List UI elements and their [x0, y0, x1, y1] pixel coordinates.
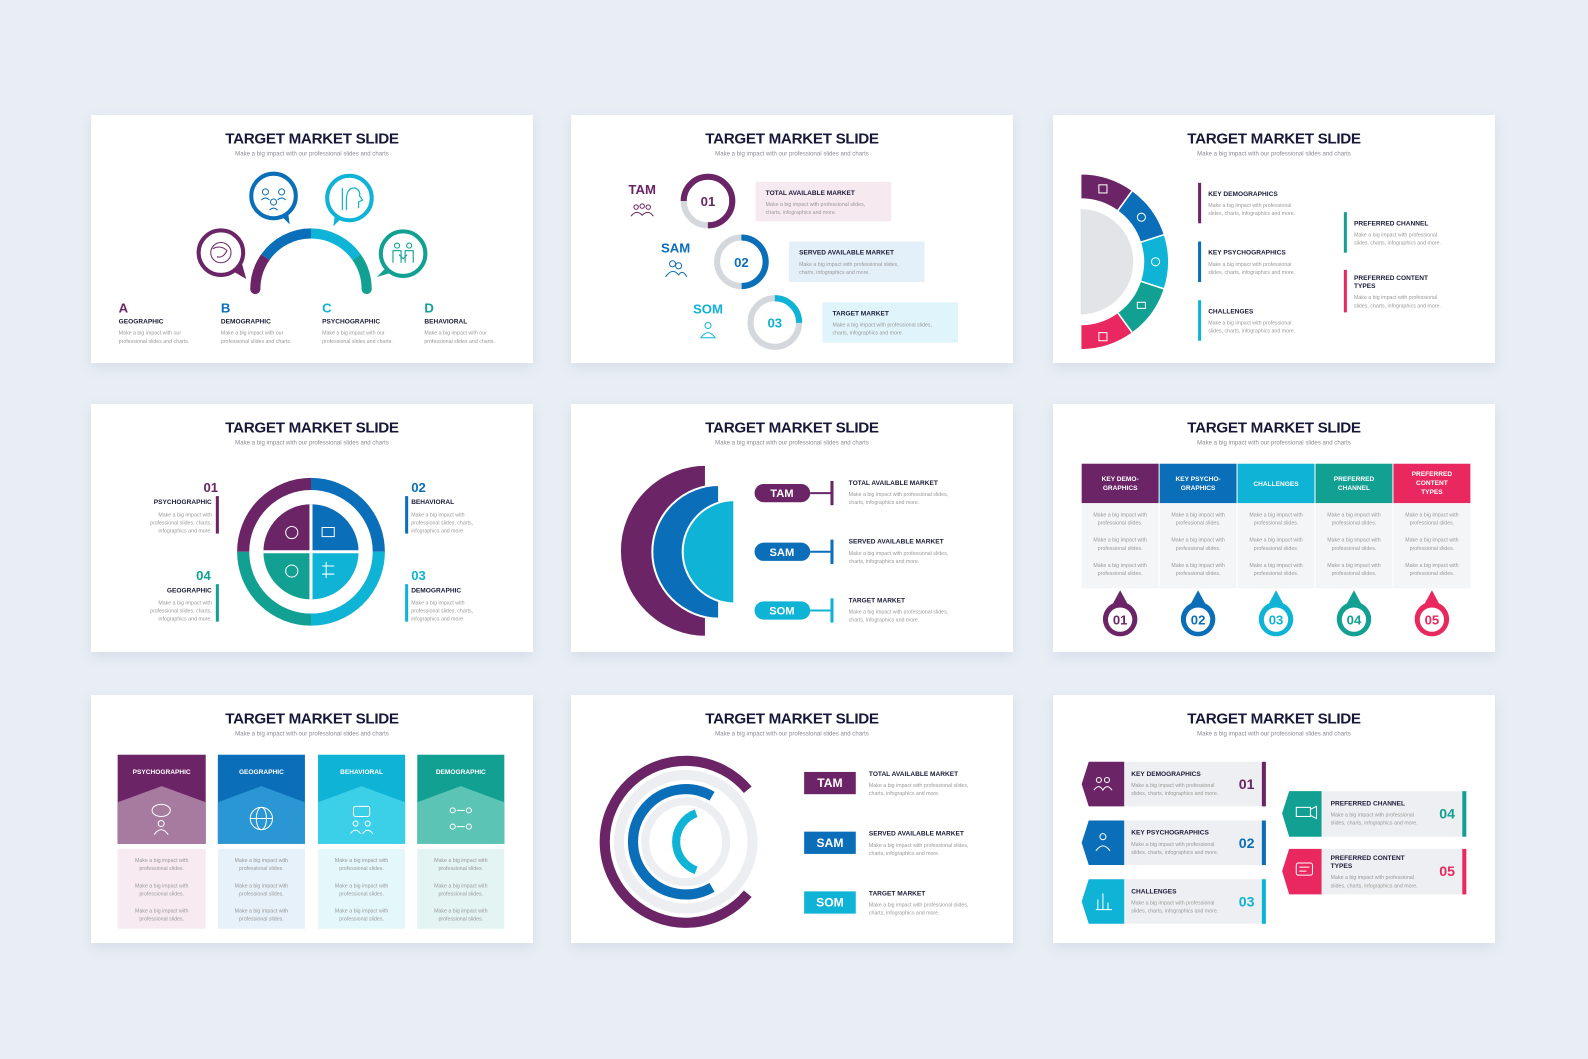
column 03: Make a big impact with — [1249, 538, 1303, 544]
SOM row: charts, infographics and more. — [869, 911, 940, 917]
segment A: GEOGRAPHIC — [119, 319, 164, 326]
SAM row — [755, 539, 948, 565]
card demographic: professional slides. — [438, 917, 483, 923]
title: TARGET MARKET SLIDE — [1187, 710, 1361, 727]
slide 1: arc with bubbles — [91, 115, 533, 363]
title — [1187, 130, 1361, 157]
title: TARGET MARKET SLIDE — [705, 419, 879, 436]
item: preferred content types: PREFERRED CONTENT — [1354, 275, 1428, 282]
TAM row — [804, 771, 968, 797]
label 02 behavioral: infographics and more. — [411, 529, 465, 535]
segment C: C — [322, 300, 332, 315]
column 04: PREFERRED — [1334, 476, 1374, 483]
SAM row: Make a big impact with professional slides, — [799, 262, 899, 268]
card psychographic: professional slides. — [139, 917, 184, 923]
item: challenges: CHALLENGES — [1208, 308, 1254, 315]
column 03: CHALLENGES — [1253, 481, 1299, 488]
TAM row: TOTAL AVAILABLE MARKET — [849, 480, 938, 487]
item 02 — [1082, 821, 1266, 865]
column 01: professional slides. — [1098, 520, 1142, 526]
column 05: Make a big impact with — [1405, 563, 1459, 569]
segment A — [119, 300, 189, 345]
segment C: Make a big impact with our — [322, 331, 385, 337]
TAM row: Make a big impact with professional slides, — [849, 492, 948, 498]
column 05: professional slides. — [1410, 571, 1454, 577]
SOM row: SOM — [693, 301, 723, 316]
column 02: Make a big impact with — [1171, 563, 1225, 569]
column 04: Make a big impact with — [1327, 538, 1381, 544]
column 03: 03 — [1269, 613, 1283, 628]
item 04 — [1282, 791, 1466, 837]
column 05 — [1393, 464, 1470, 636]
SOM row: charts, infographics and more. — [832, 331, 903, 337]
SOM row — [693, 298, 958, 347]
title — [705, 419, 879, 446]
item 01: KEY DEMOGRAPHICS — [1131, 771, 1201, 778]
SOM row: TARGET MARKET — [869, 890, 925, 897]
item 05: 05 — [1439, 864, 1455, 880]
column 02: Make a big impact with — [1171, 512, 1225, 518]
label 02 behavioral: 02 — [411, 480, 426, 495]
SAM row: SERVED AVAILABLE MARKET — [869, 831, 964, 838]
column 01: professional slides. — [1098, 546, 1142, 552]
TAM row: TOTAL AVAILABLE MARKET — [766, 190, 855, 197]
label 03 demographic: DEMOGRAPHIC — [411, 587, 461, 594]
nested half discs — [620, 465, 734, 637]
segment D: professional slides and charts. — [424, 339, 495, 345]
column 01: Make a big impact with — [1093, 538, 1147, 544]
bubble: geographic — [199, 230, 246, 279]
card behavioral: Make a big impact with — [335, 909, 388, 915]
item: preferred channel: slides, charts, infographics and more. — [1354, 241, 1441, 247]
item 05: Make a big impact with professional — [1331, 875, 1414, 881]
column 04: Make a big impact with — [1327, 512, 1381, 518]
item: challenges — [1198, 300, 1295, 341]
title: TARGET MARKET SLIDE — [225, 710, 399, 727]
TAM row: TAM — [817, 776, 843, 790]
title: Make a big impact with our professional slides and charts — [715, 731, 869, 737]
label 04 geographic: infographics and more. — [158, 617, 212, 623]
card demographic: Make a big impact with — [434, 883, 488, 889]
segment B: professional slides and charts. — [221, 339, 292, 345]
column 03: professional slides. — [1254, 546, 1298, 552]
SAM row: charts, infographics and more. — [799, 270, 870, 276]
title — [1187, 710, 1361, 737]
label 02 behavioral: BEHAVIORAL — [411, 499, 454, 506]
card behavioral: Make a big impact with — [335, 858, 388, 864]
title — [705, 710, 879, 737]
segment A: professional slides and charts. — [119, 339, 189, 345]
item 02: slides, charts, infographics and more. — [1131, 850, 1218, 856]
TAM row: charts, infographics and more. — [869, 791, 940, 797]
card behavioral: BEHAVIORAL — [340, 769, 383, 776]
column 05: Make a big impact with — [1405, 538, 1459, 544]
item 04: slides, charts, infographics and more. — [1331, 821, 1418, 827]
title: Make a big impact with our professional slides and charts — [1197, 440, 1351, 446]
column 01: professional slides. — [1098, 571, 1142, 577]
card psychographic: professional slides. — [139, 891, 184, 897]
item 05: PREFERRED CONTENT — [1331, 855, 1405, 862]
item: key psychographics — [1198, 242, 1295, 282]
bubble: behavioral — [377, 231, 425, 277]
item: challenges: slides, charts, infographics and more. — [1208, 329, 1295, 335]
title: Make a big impact with our professional slides and charts — [235, 440, 389, 446]
column 04 — [1316, 464, 1392, 636]
column 04: professional slides. — [1332, 571, 1376, 577]
card psychographic: Make a big impact with — [135, 909, 188, 915]
column 02: 02 — [1191, 613, 1205, 628]
segment A: Make a big impact with our — [119, 331, 181, 337]
title: Make a big impact with our professional slides and charts — [235, 151, 389, 157]
half donut chart — [1081, 174, 1169, 350]
card demographic: Make a big impact with — [434, 858, 488, 864]
card psychographic: Make a big impact with — [135, 883, 188, 889]
card behavioral: professional slides. — [339, 866, 384, 872]
slide 7: four column cards — [91, 695, 533, 943]
SOM row: TARGET MARKET — [832, 310, 889, 317]
item: challenges: Make a big impact with professional — [1208, 321, 1291, 327]
column 04: CHANNEL — [1338, 485, 1370, 492]
SAM row — [661, 237, 925, 286]
title — [225, 419, 399, 446]
title: TARGET MARKET SLIDE — [1187, 419, 1361, 436]
column 03: professional slides. — [1254, 571, 1298, 577]
SAM row: SAM — [661, 241, 690, 256]
title — [225, 710, 399, 737]
SAM row — [804, 831, 968, 857]
SOM row: SOM — [769, 606, 795, 618]
SOM row: Make a big impact with professional slides, — [849, 610, 948, 616]
card demographic: Make a big impact with — [434, 909, 488, 915]
item 03: CHALLENGES — [1131, 888, 1177, 895]
title: Make a big impact with our professional slides and charts — [1197, 731, 1351, 737]
label 02 behavioral: Make a big impact with — [411, 512, 465, 518]
concentric arc chart — [605, 761, 753, 923]
item 03 — [1082, 879, 1266, 924]
card geographic: professional slides. — [239, 891, 284, 897]
item: preferred content types: TYPES — [1354, 283, 1376, 290]
label 04 geographic — [150, 568, 219, 623]
label 02 behavioral — [405, 480, 473, 535]
item: preferred content types: Make a big impact with professional — [1354, 295, 1437, 301]
label 04 geographic: Make a big impact with — [158, 600, 212, 606]
card geographic: Make a big impact with — [235, 883, 288, 889]
item: preferred content types: slides, charts, infographics and more. — [1354, 303, 1441, 309]
SOM row: charts, infographics and more. — [849, 618, 919, 624]
label 03 demographic: infographics and more. — [411, 617, 465, 623]
card demographic: DEMOGRAPHIC — [436, 769, 486, 776]
column 02: Make a big impact with — [1171, 538, 1225, 544]
title: TARGET MARKET SLIDE — [1187, 130, 1361, 147]
column 01: Make a big impact with — [1093, 512, 1147, 518]
SOM row: Make a big impact with professional slides, — [832, 323, 932, 329]
item 05: slides, charts, infographics and more. — [1331, 883, 1418, 889]
title — [1187, 419, 1361, 446]
title — [225, 130, 399, 157]
segment C: PSYCHOGRAPHIC — [322, 319, 380, 326]
item: preferred channel — [1344, 212, 1441, 253]
bubble: demographic — [251, 174, 296, 224]
column 05: TYPES — [1421, 489, 1443, 496]
SAM row: SERVED AVAILABLE MARKET — [849, 539, 944, 546]
column 02: professional slides. — [1176, 546, 1220, 552]
item: key demographics: Make a big impact with professional — [1208, 203, 1291, 209]
item 02: KEY PSYCHOGRAPHICS — [1131, 830, 1209, 837]
column 05: 05 — [1425, 613, 1439, 628]
SOM row: Make a big impact with professional slides, — [869, 903, 968, 909]
TAM row — [628, 177, 891, 225]
slide 9: tabbed list — [1053, 695, 1495, 943]
SAM row: charts, infographics and more. — [869, 851, 940, 857]
title: Make a big impact with our professional slides and charts — [1197, 151, 1351, 157]
column 03: Make a big impact with — [1249, 512, 1303, 518]
segment D: D — [424, 300, 434, 315]
item 03: 03 — [1239, 895, 1255, 911]
column 05: Make a big impact with — [1405, 512, 1459, 518]
slide 6: five column table with drops — [1053, 404, 1495, 652]
title: Make a big impact with our professional slides and charts — [715, 440, 869, 446]
column 05: CONTENT — [1416, 480, 1448, 487]
TAM row — [755, 480, 948, 506]
item 02: Make a big impact with professional — [1131, 842, 1214, 848]
column 04: professional slides. — [1332, 520, 1376, 526]
card psychographic: PSYCHOGRAPHIC — [133, 769, 191, 776]
SAM row: SERVED AVAILABLE MARKET — [799, 250, 894, 257]
SOM row: 03 — [767, 316, 782, 331]
column 02: professional slides. — [1176, 571, 1220, 577]
column 02: GRAPHICS — [1181, 485, 1216, 492]
card psychographic: professional slides. — [139, 866, 184, 872]
title: TARGET MARKET SLIDE — [225, 419, 399, 436]
SOM row — [755, 597, 948, 624]
segment B: B — [221, 300, 230, 315]
column 04: 04 — [1347, 613, 1362, 628]
label 01 psychographic: Make a big impact with — [158, 512, 212, 518]
item 02: 02 — [1239, 836, 1255, 852]
column 03 — [1238, 464, 1314, 636]
SOM row: TARGET MARKET — [849, 597, 905, 604]
item: key psychographics: slides, charts, infographics and more. — [1208, 270, 1295, 276]
slide 8: concentric arcs — [571, 695, 1013, 943]
SAM row: Make a big impact with professional slides, — [869, 843, 968, 849]
item: key demographics — [1198, 183, 1295, 223]
card demographic: professional slides. — [438, 891, 483, 897]
item 01 — [1082, 762, 1266, 806]
column 02 — [1160, 464, 1237, 636]
arc segments — [250, 233, 372, 294]
SOM row: SOM — [816, 896, 844, 910]
segment B — [221, 300, 292, 345]
segment C: professional slides and charts. — [322, 339, 393, 345]
column 03: Make a big impact with — [1249, 563, 1303, 569]
item: key psychographics: Make a big impact with professional — [1208, 262, 1291, 268]
title: Make a big impact with our professional slides and charts — [235, 731, 389, 737]
column 01: Make a big impact with — [1093, 563, 1147, 569]
segment C — [322, 300, 393, 345]
card psychographic — [118, 755, 206, 929]
column 01: GRAPHICS — [1103, 485, 1138, 492]
slide 2: TAM SAM SOM rings — [571, 115, 1013, 363]
item: preferred channel: Make a big impact with professional — [1354, 232, 1437, 238]
title: Make a big impact with our professional slides and charts — [715, 151, 869, 157]
card geographic: Make a big impact with — [235, 909, 288, 915]
label 01 psychographic — [150, 480, 219, 535]
bubble: psychographic — [327, 176, 372, 226]
card geographic: professional slides. — [239, 866, 284, 872]
TAM row: Make a big impact with professional slides, — [766, 202, 865, 208]
column 05: PREFERRED — [1412, 471, 1452, 478]
TAM row: charts, infographics and more. — [849, 500, 919, 506]
column 05: professional slides. — [1410, 520, 1454, 526]
item: preferred content types — [1344, 270, 1441, 312]
column 02: KEY PSYCHO- — [1176, 476, 1221, 483]
item: key demographics: slides, charts, infographics and more. — [1208, 211, 1295, 217]
slide 4: quadrant circle — [91, 404, 533, 652]
label 01 psychographic: infographics and more. — [158, 529, 212, 535]
title: TARGET MARKET SLIDE — [705, 130, 879, 147]
label 01 psychographic: PSYCHOGRAPHIC — [154, 499, 212, 506]
card demographic: professional slides. — [438, 866, 483, 872]
title: TARGET MARKET SLIDE — [705, 710, 879, 727]
item: preferred channel: PREFERRED CHANNEL — [1354, 220, 1428, 227]
card demographic — [417, 755, 504, 929]
column 01 — [1082, 464, 1159, 636]
card geographic: Make a big impact with — [235, 858, 288, 864]
segment D — [424, 300, 495, 345]
label 03 demographic: Make a big impact with — [411, 600, 465, 606]
item 04: PREFERRED CHANNEL — [1331, 800, 1405, 807]
item 04: Make a big impact with professional — [1331, 812, 1414, 818]
item 04: 04 — [1439, 806, 1455, 822]
label 03 demographic: 03 — [411, 568, 426, 583]
TAM row: TAM — [770, 488, 794, 500]
item 01: 01 — [1239, 777, 1255, 793]
card behavioral: professional slides. — [339, 917, 384, 923]
segment D: BEHAVIORAL — [424, 319, 467, 326]
TAM row: Make a big impact with professional slides, — [869, 783, 968, 789]
item 03: Make a big impact with professional — [1131, 901, 1214, 907]
column 03: professional slides. — [1254, 520, 1298, 526]
segment B: DEMOGRAPHIC — [221, 319, 271, 326]
label 01 psychographic: 01 — [203, 480, 218, 495]
SAM row: charts, infographics and more. — [849, 559, 919, 565]
item 05 — [1282, 849, 1466, 894]
SAM row: Make a big impact with professional slides, — [849, 551, 948, 557]
TAM row: 01 — [701, 194, 715, 209]
SAM row: 02 — [734, 255, 749, 270]
SAM row: SAM — [816, 836, 843, 850]
card geographic — [218, 755, 305, 929]
SOM row — [804, 890, 968, 917]
label 04 geographic: 04 — [196, 568, 211, 583]
label 04 geographic: professional slides, charts, — [150, 609, 212, 615]
segment B: Make a big impact with our — [221, 331, 284, 337]
slide 5: nested half circles — [571, 404, 1013, 652]
item 01: slides, charts, infographics and more. — [1131, 791, 1218, 797]
column 04: professional slides. — [1332, 546, 1376, 552]
column 04: Make a big impact with — [1327, 563, 1381, 569]
label 01 psychographic: professional slides, charts, — [150, 520, 212, 526]
segment D: Make a big impact with our — [424, 331, 487, 337]
label 03 demographic: professional slides, charts, — [411, 609, 473, 615]
item: key demographics: KEY DEMOGRAPHICS — [1208, 191, 1278, 198]
TAM row: charts, infographics and more. — [766, 210, 836, 216]
title — [705, 130, 879, 157]
segment A: A — [119, 300, 129, 315]
card behavioral: Make a big impact with — [335, 883, 388, 889]
column 01: KEY DEMO- — [1102, 476, 1139, 483]
card behavioral: professional slides. — [339, 891, 384, 897]
TAM row: TOTAL AVAILABLE MARKET — [869, 771, 958, 778]
column 02: professional slides. — [1176, 520, 1220, 526]
quadrant circle chart — [243, 484, 379, 620]
card geographic: professional slides. — [239, 917, 284, 923]
title: TARGET MARKET SLIDE — [225, 130, 399, 147]
card psychographic: Make a big impact with — [135, 858, 188, 864]
item 03: slides, charts, infographics and more. — [1131, 909, 1218, 915]
SAM row: SAM — [770, 547, 794, 559]
card geographic: GEOGRAPHIC — [239, 769, 284, 776]
slide 3: half donut with list — [1053, 115, 1495, 363]
label 03 demographic — [405, 568, 473, 623]
column 05: professional slides. — [1410, 546, 1454, 552]
label 02 behavioral: professional slides, charts, — [411, 520, 473, 526]
TAM row: TAM — [628, 182, 656, 197]
column 01: 01 — [1113, 613, 1127, 628]
item: key psychographics: KEY PSYCHOGRAPHICS — [1208, 250, 1286, 257]
item 01: Make a big impact with professional — [1131, 783, 1214, 789]
item 05: TYPES — [1331, 863, 1353, 870]
card behavioral — [318, 755, 405, 929]
label 04 geographic: GEOGRAPHIC — [167, 587, 212, 594]
